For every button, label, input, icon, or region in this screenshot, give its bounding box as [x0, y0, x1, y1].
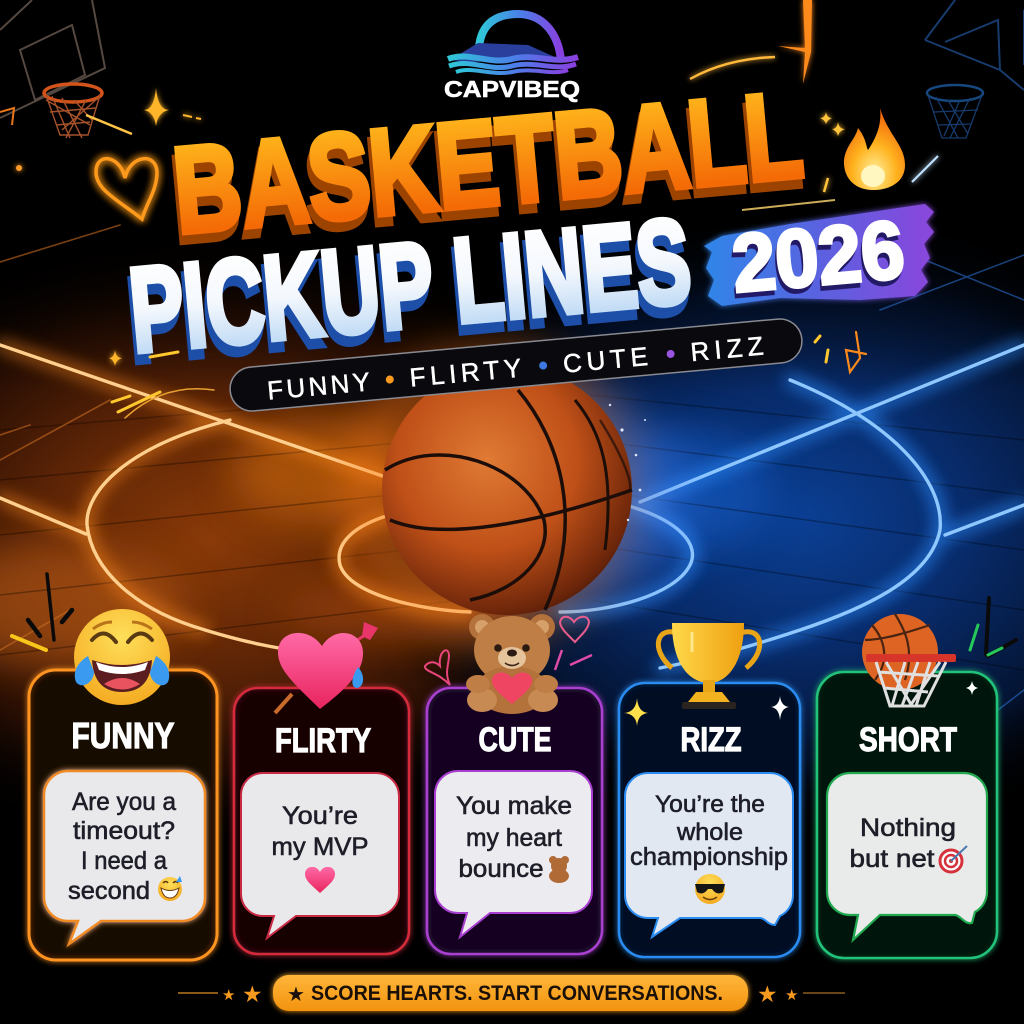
emoji: laughing face [74, 609, 170, 705]
emoji: small teddy [549, 856, 569, 883]
decoration: tagline stars right [757, 981, 845, 1007]
card frame [427, 688, 602, 954]
card heading: FLIRTY [275, 722, 371, 760]
bubble text: my heart [466, 824, 562, 852]
card: funny [29, 670, 217, 960]
speech bubble [44, 771, 205, 944]
decoration: rizz sparkles [624, 696, 789, 726]
logo mark: arch and waves [448, 14, 578, 73]
bubble text: You make [456, 792, 572, 820]
card heading: SHORT [859, 721, 957, 759]
icon: neon heart outline [96, 159, 157, 219]
decoration: tagline stars right: ★ [785, 987, 798, 1004]
bubble text: my MVP [272, 833, 368, 861]
bubble text: You’re the [655, 791, 765, 818]
card frame [234, 688, 409, 954]
card frame [817, 672, 997, 958]
tagline pill: SCORE HEARTS. START CONVERSATIONS. [311, 982, 723, 1005]
decoration: funny action marks [12, 574, 72, 650]
bubble text: I need a [81, 847, 167, 875]
subtitle pill: FLIRTY [408, 353, 523, 393]
emoji: basketball in hoop [862, 614, 956, 706]
card frame [619, 683, 800, 957]
title: Pickup Lines [121, 194, 697, 388]
bubble text: You’re [282, 802, 358, 830]
logo wordmark: CAPVIBEQ [444, 76, 580, 102]
tagline pill [273, 975, 748, 1011]
decoration: tagline stars right: ★ [757, 981, 778, 1007]
subtitle pill: CUTE [562, 341, 649, 379]
decoration: right sparkles [820, 112, 938, 192]
card frame [29, 670, 217, 960]
speech bubble [241, 773, 399, 938]
decoration: pink doodle hearts [425, 617, 592, 685]
decoration: tagline stars left: ★ [242, 981, 263, 1007]
emoji: target [940, 846, 967, 872]
title: Pickup Lines: PICKUP LINES [124, 194, 696, 378]
card: flirty [234, 688, 409, 954]
emoji: trophy [658, 623, 760, 709]
card heading: RIZZ [680, 721, 742, 759]
badge: 2026 brush stroke: 2026 [727, 209, 906, 315]
court lines: blue side [560, 250, 1024, 720]
emoji: small sweat grin [158, 876, 182, 901]
emoji: sunglasses face [695, 874, 725, 904]
decoration: short action marks [970, 598, 1016, 656]
decoration: tagline stars left [178, 981, 263, 1007]
card heading: CUTE [478, 721, 552, 759]
bubble text: championship [630, 843, 788, 871]
decoration: tagline stars left: ★ [222, 987, 235, 1004]
logo: Capvibeq [444, 14, 580, 102]
card: cute [427, 688, 602, 954]
subtitle pill: RIZZ [689, 331, 765, 367]
bubble text: whole [676, 819, 743, 846]
bubble text: second [68, 877, 150, 905]
speech bubble [827, 773, 987, 940]
bubble text: Are you a [72, 788, 176, 816]
decoration: orange lightning spark [690, 0, 812, 84]
title: Basketball: BASKETBALL [166, 76, 806, 268]
sparkle [966, 681, 978, 695]
basketball centre [340, 340, 690, 640]
bubble text [68, 788, 176, 905]
subtitle pill: FUNNY [266, 366, 371, 406]
speech bubble [435, 771, 592, 937]
speech bubble [625, 773, 793, 937]
bubble text: bounce [458, 855, 544, 883]
decoration: confetti around subtitle [112, 332, 866, 418]
bubble text: Nothing [860, 814, 956, 842]
icon: flame [844, 108, 905, 190]
card: short [817, 672, 997, 958]
emoji: small pink heart [305, 867, 335, 893]
bubble text [456, 792, 572, 883]
badge: 2026 brush stroke: 2026 [729, 204, 908, 310]
bubble text [272, 802, 368, 861]
emoji: pink heart with arrow [275, 622, 378, 713]
title: Basketball: BASKETBALL [168, 66, 808, 259]
card: rizz [619, 683, 800, 957]
title: Pickup Lines: PICKUP LINES [122, 204, 694, 388]
bubble text [630, 791, 788, 871]
court lines: orange side [0, 225, 470, 658]
bubble text [850, 814, 956, 873]
tagline pill: ★ [287, 984, 305, 1006]
emoji: teddy bear with heart [466, 614, 558, 714]
basketball hoop: left corner [0, 0, 132, 138]
card heading: FUNNY [72, 715, 174, 756]
bubble text: timeout? [73, 817, 175, 845]
decoration: left sparkles [16, 88, 201, 366]
subtitle pill [228, 317, 804, 413]
basketball hoop: right corner [925, 0, 1024, 138]
bubble text: but net [850, 845, 935, 873]
